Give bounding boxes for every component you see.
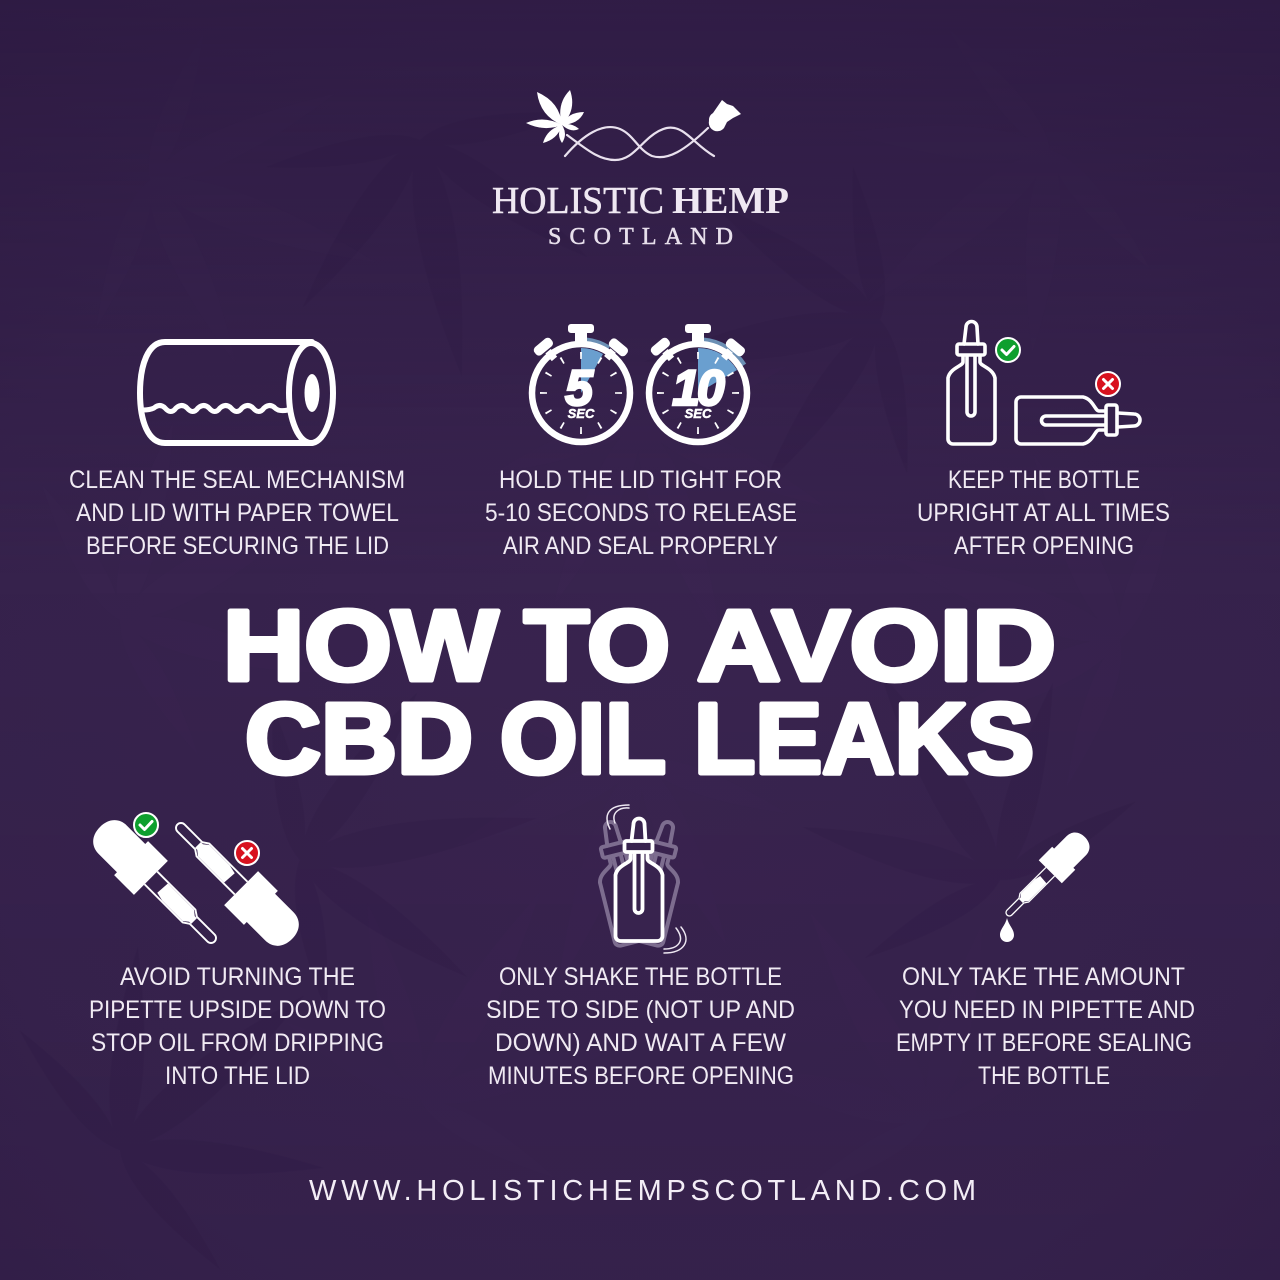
logo: Holistic Hemp Scotland [492, 90, 789, 250]
icon: helix strands [565, 127, 714, 160]
text: pipette step caption: PIPETTE UPSIDE DOWN TO [89, 996, 386, 1024]
text: upright step caption: KEEP THE BOTTLE [948, 466, 1140, 494]
text: pipette step caption: AVOID TURNING THE [120, 963, 355, 991]
text: hold step caption [485, 466, 797, 560]
step: clean with paper towel [69, 342, 405, 560]
text: shake step caption: MINUTES BEFORE OPENING [488, 1062, 794, 1090]
website url: WWW.HOLISTICHEMPSCOTLAND.COM [309, 1175, 976, 1207]
text: hold step caption: HOLD THE LID TIGHT FOR [499, 466, 782, 494]
text: hold step caption: 5-10 SECONDS TO RELEASE [485, 499, 797, 527]
icon: pipette upside down [160, 807, 309, 956]
step: only take what you need [896, 826, 1195, 1090]
text: upright step caption: UPRIGHT AT ALL TIMES [917, 499, 1170, 527]
icon: upright bottle [948, 322, 995, 444]
text: shake step caption [486, 963, 795, 1090]
icon: tipped bottle [1016, 397, 1140, 444]
step: keep bottle upright [917, 322, 1170, 560]
text: clean step caption: CLEAN THE SEAL MECHANISM [69, 466, 405, 494]
icon: thistle [709, 100, 741, 131]
icon: shaking bottle [586, 805, 692, 953]
step: shake side to side [486, 805, 795, 1090]
text: pipette step caption: INTO THE LID [165, 1062, 310, 1090]
icon: paper towel roll [140, 342, 333, 443]
icon: cannabis leaf [526, 90, 584, 143]
icon: green check badge [996, 338, 1020, 362]
text: clean step caption [69, 466, 405, 560]
text: shake step caption: DOWN) AND WAIT A FEW [495, 1029, 786, 1057]
text: shake step caption: SIDE TO SIDE (NOT UP AND [486, 996, 795, 1024]
text: amount step caption: EMPTY IT BEFORE SEALING [896, 1029, 1192, 1057]
text: amount step caption: ONLY TAKE THE AMOUNT [902, 963, 1185, 991]
title: OIL [500, 683, 666, 795]
logo subtitle: SCOTLAND [548, 224, 733, 250]
icon: oil drop [1000, 918, 1014, 942]
step: hold the lid [485, 324, 797, 560]
icon: green check badge [134, 813, 158, 837]
icon: 10 second stopwatch: 10 [672, 360, 725, 416]
icon: 5 second stopwatch [532, 324, 630, 442]
title: CBD [245, 683, 473, 795]
text: shake step caption: ONLY SHAKE THE BOTTLE [499, 963, 782, 991]
icon: red cross badge [1096, 372, 1120, 396]
text: amount step caption: THE BOTTLE [978, 1062, 1110, 1090]
icon: dropper [995, 826, 1096, 927]
icon: 5 second stopwatch: 5 [565, 360, 594, 416]
text: pipette step caption [89, 963, 386, 1090]
text: amount step caption [896, 963, 1195, 1090]
icon: 5 second stopwatch: SEC [568, 406, 595, 421]
text: amount step caption: YOU NEED IN PIPETTE AND [899, 996, 1195, 1024]
title: TO [524, 590, 670, 702]
logo wordmark bold: HEMP [672, 180, 789, 222]
text: clean step caption: AND LID WITH PAPER TOWEL [76, 499, 399, 527]
title: HOW [223, 590, 499, 702]
title: LEAKS [694, 683, 1034, 795]
step: avoid turning pipette [83, 807, 386, 1090]
text: pipette step caption: STOP OIL FROM DRIPPING [91, 1029, 384, 1057]
icon: pipette pointing down [83, 810, 232, 959]
title [223, 590, 1056, 795]
text: clean step caption: BEFORE SECURING THE LID [86, 532, 389, 560]
text: hold step caption: AIR AND SEAL PROPERLY [503, 532, 778, 560]
icon: 10 second stopwatch [649, 324, 747, 442]
text: upright step caption: AFTER OPENING [954, 532, 1134, 560]
icon: red cross badge [235, 841, 259, 865]
text: upright step caption [917, 466, 1170, 560]
icon: 10 second stopwatch: SEC [685, 406, 712, 421]
logo wordmark: HOLISTIC [492, 180, 664, 222]
title: AVOID [697, 590, 1056, 702]
